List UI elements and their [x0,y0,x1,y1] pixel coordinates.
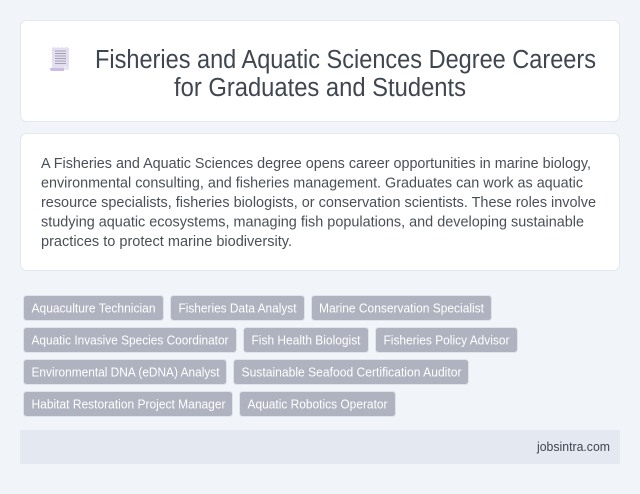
tag: Aquatic Invasive Species Coordinator: Aquatic Invasive Species Coordinator [32,332,229,348]
footer [20,430,620,464]
tag: Fish Health Biologist [244,328,368,352]
tag: Habitat Restoration Project Manager: Habitat Restoration Project Manager [32,396,226,412]
panel: description [20,134,620,270]
tag: Aquatic Robotics Operator: Aquatic Robotics Operator [248,396,388,412]
tag: Environmental DNA (eDNA) Analyst [24,360,226,384]
tag: Fisheries Data Analyst [170,296,304,320]
title: for Graduates and Students [174,74,466,102]
tag: Aquaculture Technician: Aquaculture Technician [32,300,156,316]
tag: Marine Conservation Specialist [312,296,492,320]
title [95,46,596,102]
tag: Aquatic Invasive Species Coordinator [24,328,236,352]
tag: Fisheries Policy Advisor: Fisheries Policy Advisor [384,332,510,348]
text block: description: studying aquatic ecosystems, managing fish populations, and developing sustainable [41,214,584,230]
panel: header [20,20,620,122]
tag: Aquatic Robotics Operator [240,392,396,416]
text block: description: environmental consulting, and fisheries management. Graduates can work as aquatic [41,176,584,192]
tag: Sustainable Seafood Certification Auditor: Sustainable Seafood Certification Auditor [242,364,462,380]
text block: description: practices to protect marine biodiversity. [41,234,292,250]
tag: Fish Health Biologist: Fish Health Biologist [252,332,361,348]
icon: document scroll [50,47,69,71]
tag: Marine Conservation Specialist: Marine Conservation Specialist [319,300,484,316]
tag: Fisheries Policy Advisor [376,328,518,352]
text block: description [41,156,596,250]
tag: Habitat Restoration Project Manager [24,392,232,416]
tag: Aquaculture Technician [24,296,164,320]
tag: Sustainable Seafood Certification Auditor [234,360,468,384]
tag list [24,296,518,416]
text block: description: A Fisheries and Aquatic Sciences degree opens career opportunities in marine biology, [41,156,591,172]
text block: description: resource specialists, fisheries biologists, or conservation scientists. These roles involve [41,195,596,211]
tag: Environmental DNA (eDNA) Analyst: Environmental DNA (eDNA) Analyst [32,364,220,380]
footer source text: jobsintra.com [536,439,610,454]
title: Fisheries and Aquatic Sciences Degree Careers [95,46,596,74]
tag: Fisheries Data Analyst: Fisheries Data Analyst [178,300,297,316]
